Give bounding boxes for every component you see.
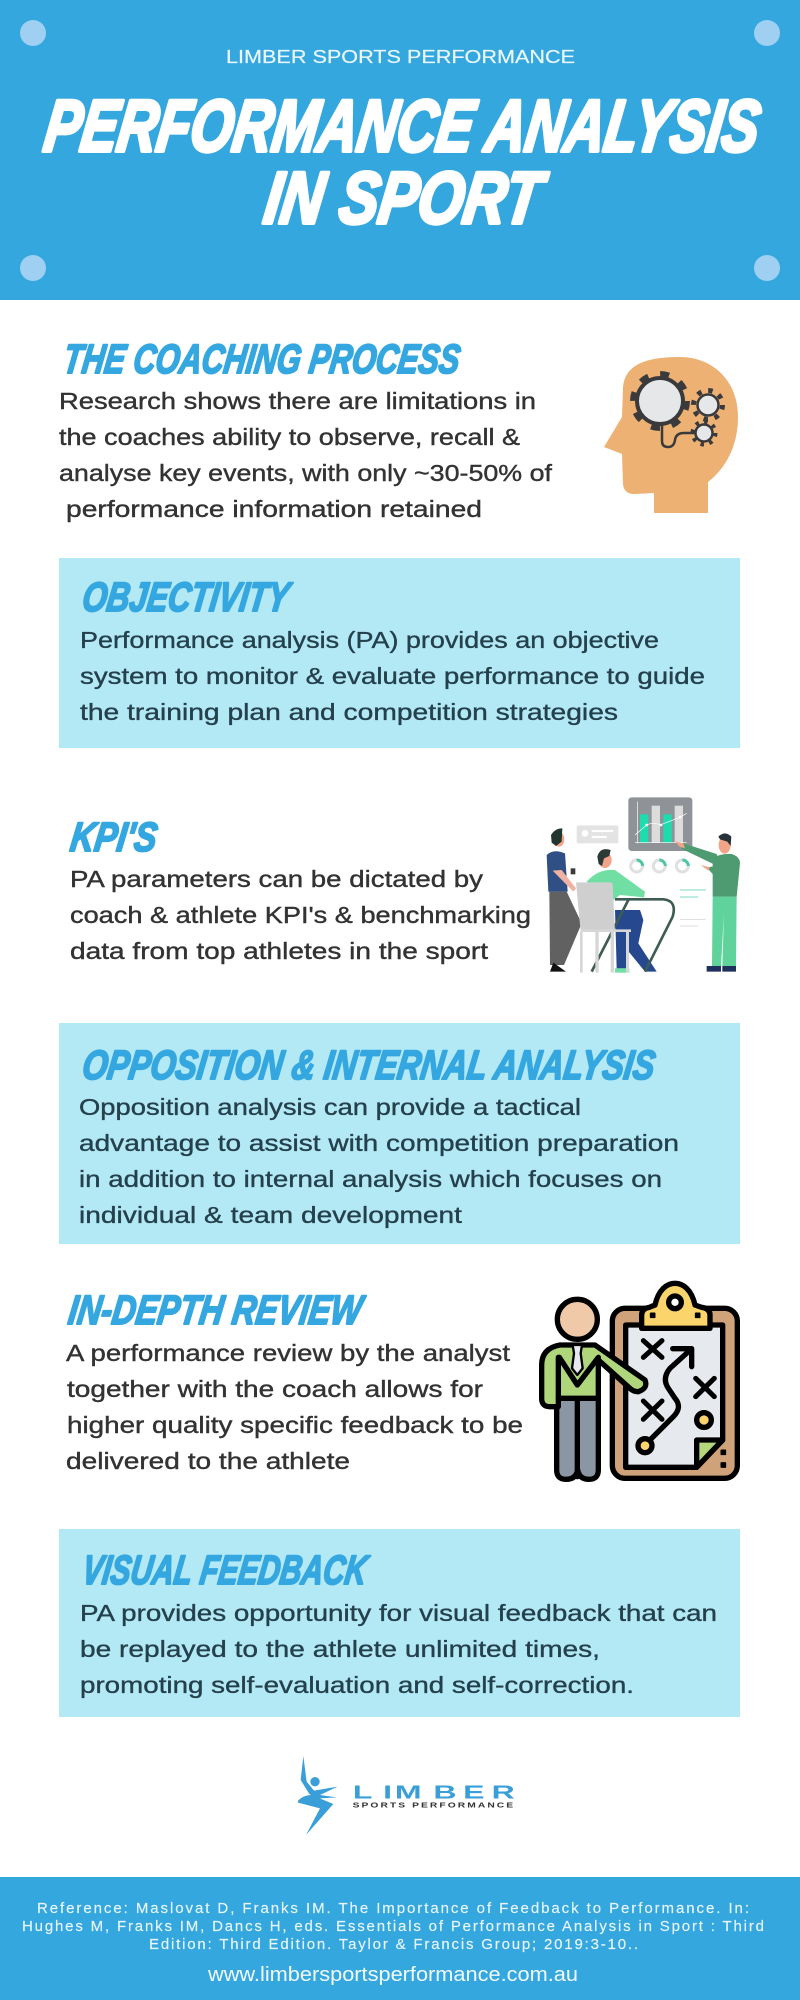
body text: the coaching process — [59, 388, 553, 522]
heading: opposition & internal analysis: OPPOSITION & INTERNAL ANALYSIS — [80, 1042, 659, 1088]
logo wordmark: LIMBER — [353, 1781, 515, 1803]
body text: KPI's: coach & athlete KPI's & benchmarking — [70, 902, 531, 928]
panel: objectivity — [59, 558, 740, 748]
title: IN SPORT — [260, 157, 551, 239]
body text: objectivity — [80, 627, 705, 725]
body text: in-depth review: higher quality specific feedback to be — [67, 1412, 523, 1438]
reference text: Edition: Third Edition. Taylor & Francis Group; 2019:3-10.. — [149, 1936, 638, 1953]
body text: visual feedback: PA provides opportunity for visual feedback that can — [80, 1600, 717, 1626]
body text: in-depth review: A performance review by the analyst — [66, 1340, 511, 1366]
presenter — [675, 833, 740, 972]
text lines — [680, 890, 706, 926]
icon: head with gears — [604, 357, 738, 513]
coach figure — [542, 1299, 646, 1479]
logo strapline: SPORTS PERFORMANCE — [353, 1801, 513, 1809]
website: www.limbersportsperformance.com.au — [207, 1964, 578, 1986]
message card — [577, 825, 618, 843]
body text: in-depth review: delivered to the athlete — [66, 1448, 350, 1474]
reference text: Hughes M, Franks IM, Dancs H, eds. Essentials of Performance Analysis in Sport : Third — [22, 1918, 764, 1935]
body text: KPI's: PA parameters can be dictated by — [70, 866, 483, 892]
body text: opposition & internal analysis: Opposition analysis can provide a tactical — [79, 1094, 581, 1120]
panel: visual feedback — [59, 1529, 740, 1717]
body text: visual feedback: promoting self-evaluation and self-correction. — [80, 1672, 634, 1698]
body text: opposition & internal analysis: advantage to assist with competition preparation — [79, 1130, 679, 1156]
organisation name: LIMBER SPORTS PERFORMANCE — [226, 47, 575, 67]
chart screen — [628, 797, 692, 851]
corner dots — [20, 20, 780, 281]
reference text: Reference: Maslovat D, Franks IM. The Importance of Feedback to Performance. In: — [37, 1900, 749, 1917]
panel: in-depth review — [66, 1283, 737, 1479]
illustration: team reviewing data — [547, 797, 740, 973]
body text: objectivity: Performance analysis (PA) provides an objective — [80, 627, 659, 653]
body text: opposition & internal analysis: in addition to internal analysis which focuses on — [79, 1166, 662, 1192]
body text: visual feedback: be replayed to the athlete unlimited times, — [80, 1636, 600, 1662]
panel: opposition & internal analysis — [59, 1023, 740, 1244]
heading: the coaching process: THE COACHING PROCESS — [61, 336, 464, 382]
reference text — [22, 1900, 764, 1953]
footer — [0, 1877, 800, 2000]
body text: objectivity: the training plan and competition strategies — [80, 699, 618, 725]
title — [40, 85, 765, 239]
header banner — [0, 0, 800, 300]
body text: opposition & internal analysis — [79, 1094, 679, 1228]
heading: objectivity: OBJECTIVITY — [80, 574, 295, 620]
heading: KPI's: KPI'S — [68, 814, 161, 860]
body text: objectivity: system to monitor & evaluate performance to guide — [80, 663, 705, 689]
body text: opposition & internal analysis: individual & team development — [79, 1202, 463, 1228]
heading: in-depth review: IN-DEPTH REVIEW — [66, 1287, 368, 1333]
panel: the coaching process — [59, 336, 738, 522]
body text: the coaching process: the coaches ability to observe, recall & — [59, 424, 520, 450]
body text: visual feedback — [80, 1600, 717, 1698]
logo figure — [298, 1756, 338, 1835]
clipboard — [612, 1283, 737, 1478]
standing colleague — [547, 828, 582, 972]
panel: KPI's — [68, 797, 740, 973]
body text: the coaching process: performance information retained — [66, 496, 482, 522]
body text: KPI's — [70, 866, 531, 964]
heading: visual feedback: VISUAL FEEDBACK — [80, 1547, 373, 1593]
table and seated colleague — [576, 849, 674, 973]
body text: in-depth review — [66, 1340, 523, 1474]
logo: Limber Sports Performance — [298, 1756, 515, 1835]
body text: the coaching process: analyse key events, with only ~30-50% of — [59, 460, 553, 486]
body text: KPI's: data from top athletes in the sport — [70, 938, 489, 964]
body text: in-depth review: together with the coach allows for — [67, 1376, 483, 1402]
icon: coach with tactics clipboard — [542, 1283, 737, 1479]
donut indicators — [631, 860, 688, 872]
body text: the coaching process: Research shows there are limitations in — [59, 388, 536, 414]
